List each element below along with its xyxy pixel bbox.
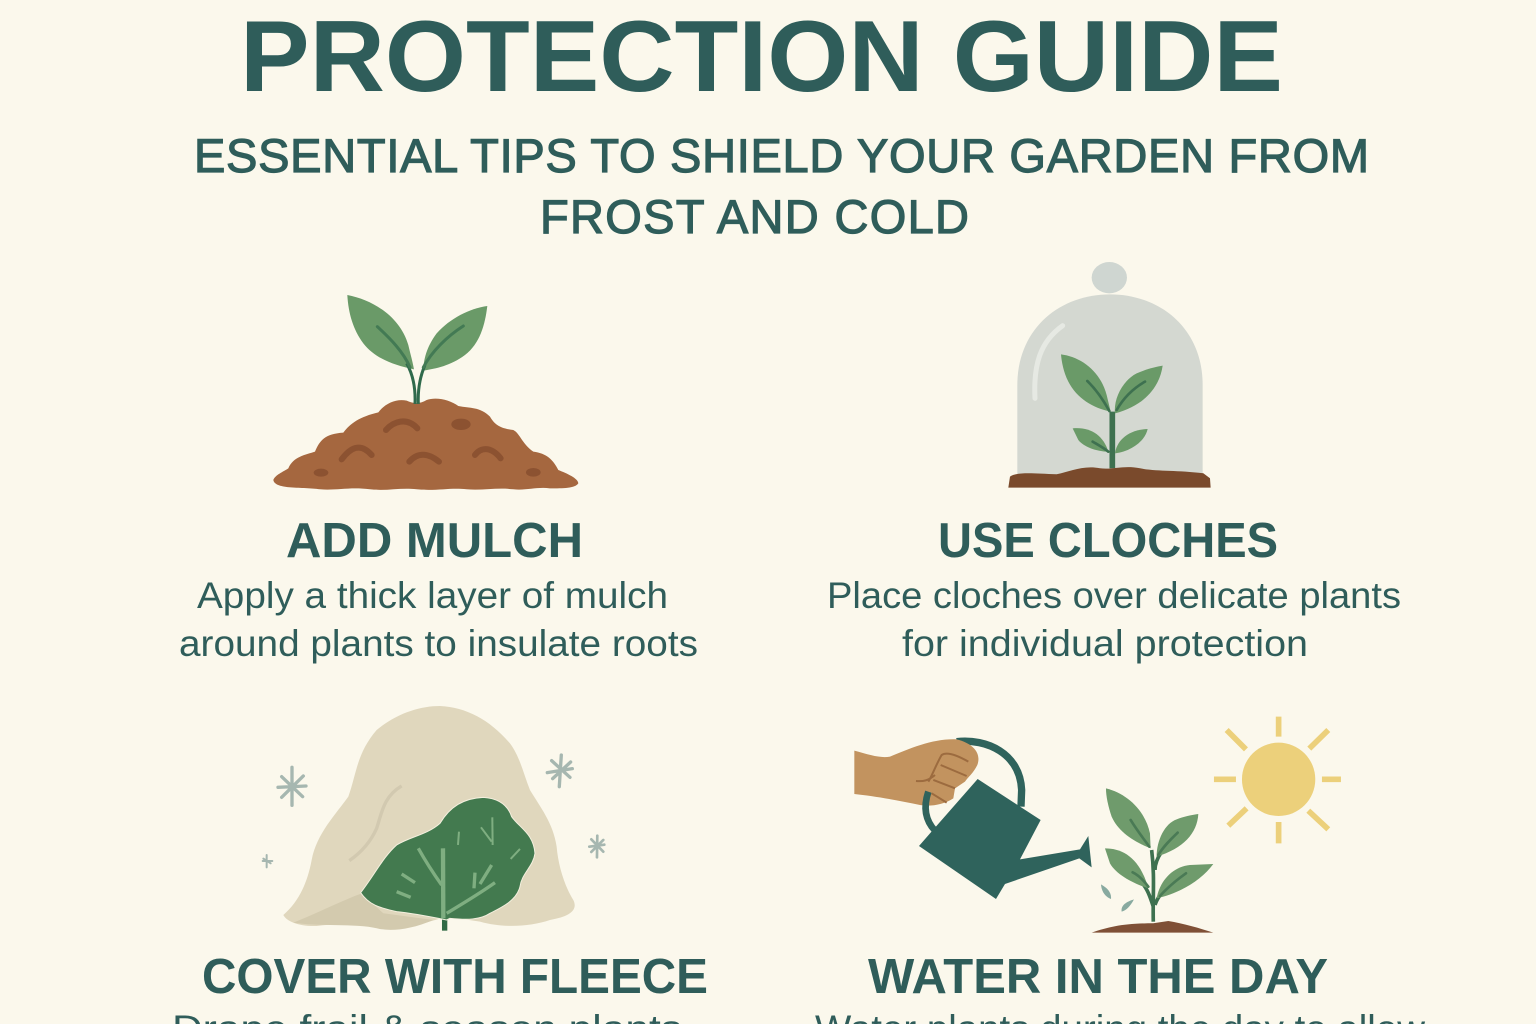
subtitle: ESSENTIAL TIPS TO SHIELD YOUR GARDEN FROM — [194, 129, 1369, 182]
text: use cloches description — [827, 575, 1401, 664]
title: PROTECTION GUIDE — [240, 1, 1283, 113]
panel: water in the day — [815, 717, 1425, 1024]
panel: cover with fleece — [172, 706, 708, 1024]
text: add mulch description: around plants to insulate roots — [179, 623, 698, 664]
text: use cloches description: Place cloches over delicate plants — [827, 575, 1401, 616]
icon: plant under glass cloche — [1008, 262, 1211, 488]
text: use cloches description: for individual protection — [902, 623, 1308, 664]
subtitle: FROST AND COLD — [540, 190, 969, 243]
heading: add mulch: ADD MULCH — [286, 514, 583, 568]
panel: use cloches — [827, 262, 1401, 664]
icon: seedling in mulch — [273, 295, 578, 490]
text: add mulch description — [179, 575, 698, 664]
heading: cover with fleece: COVER WITH FLEECE — [202, 950, 708, 1004]
icon: hand with watering can, plant and sun — [854, 717, 1341, 933]
text: add mulch description: Apply a thick layer of mulch — [197, 575, 668, 616]
heading: use cloches: USE CLOCHES — [938, 514, 1278, 568]
subtitle — [194, 129, 1369, 243]
icon: plant under fleece with frost stars — [263, 706, 604, 931]
heading: water in the day: WATER IN THE DAY — [868, 950, 1328, 1004]
panel: add mulch — [179, 295, 698, 664]
